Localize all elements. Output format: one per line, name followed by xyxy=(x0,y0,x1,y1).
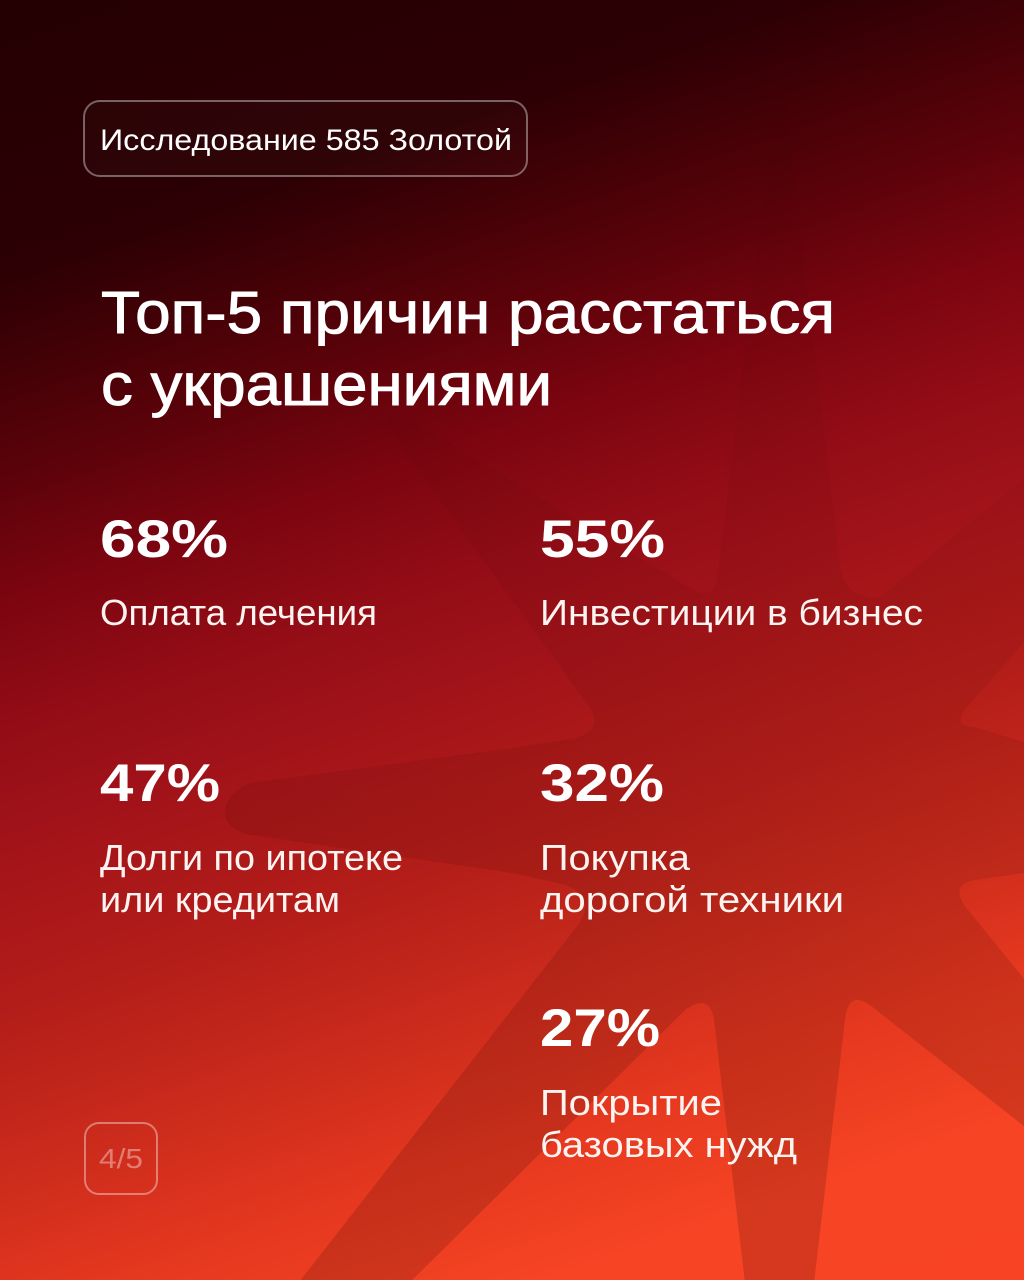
stat: 55% business xyxy=(540,510,923,633)
label: Покупка xyxy=(540,837,691,878)
value 55%: 55% xyxy=(540,510,665,569)
value 27%: 27% xyxy=(540,999,660,1058)
stat: 47% debts xyxy=(100,754,403,920)
page counter xyxy=(85,1123,157,1194)
value 68%: 68% xyxy=(100,510,228,569)
title xyxy=(101,280,835,418)
value 32%: 32% xyxy=(540,754,664,813)
stat: 27% basic needs xyxy=(540,999,797,1165)
label: Покрытие xyxy=(540,1082,722,1123)
label xyxy=(100,837,403,920)
label xyxy=(540,837,844,920)
stat: 68% treatment xyxy=(100,510,377,633)
label: или кредитам xyxy=(100,879,340,920)
label xyxy=(540,1082,797,1165)
stat: 32% electronics xyxy=(540,754,844,920)
tag: study label xyxy=(84,101,527,176)
label: базовых нужд xyxy=(540,1124,797,1165)
label: Долги по ипотеке xyxy=(100,837,403,878)
label: Оплата лечения xyxy=(100,592,377,633)
title: Топ-5 причин расстаться xyxy=(101,280,835,346)
background star shape xyxy=(225,60,1024,1280)
label: Инвестиции в бизнес xyxy=(540,592,923,633)
label: дорогой техники xyxy=(540,879,844,920)
counter text: 4/5 xyxy=(99,1143,143,1174)
title: с украшениями xyxy=(101,352,552,418)
value 47%: 47% xyxy=(100,754,220,813)
tag text: Исследование 585 Золотой xyxy=(100,124,512,157)
